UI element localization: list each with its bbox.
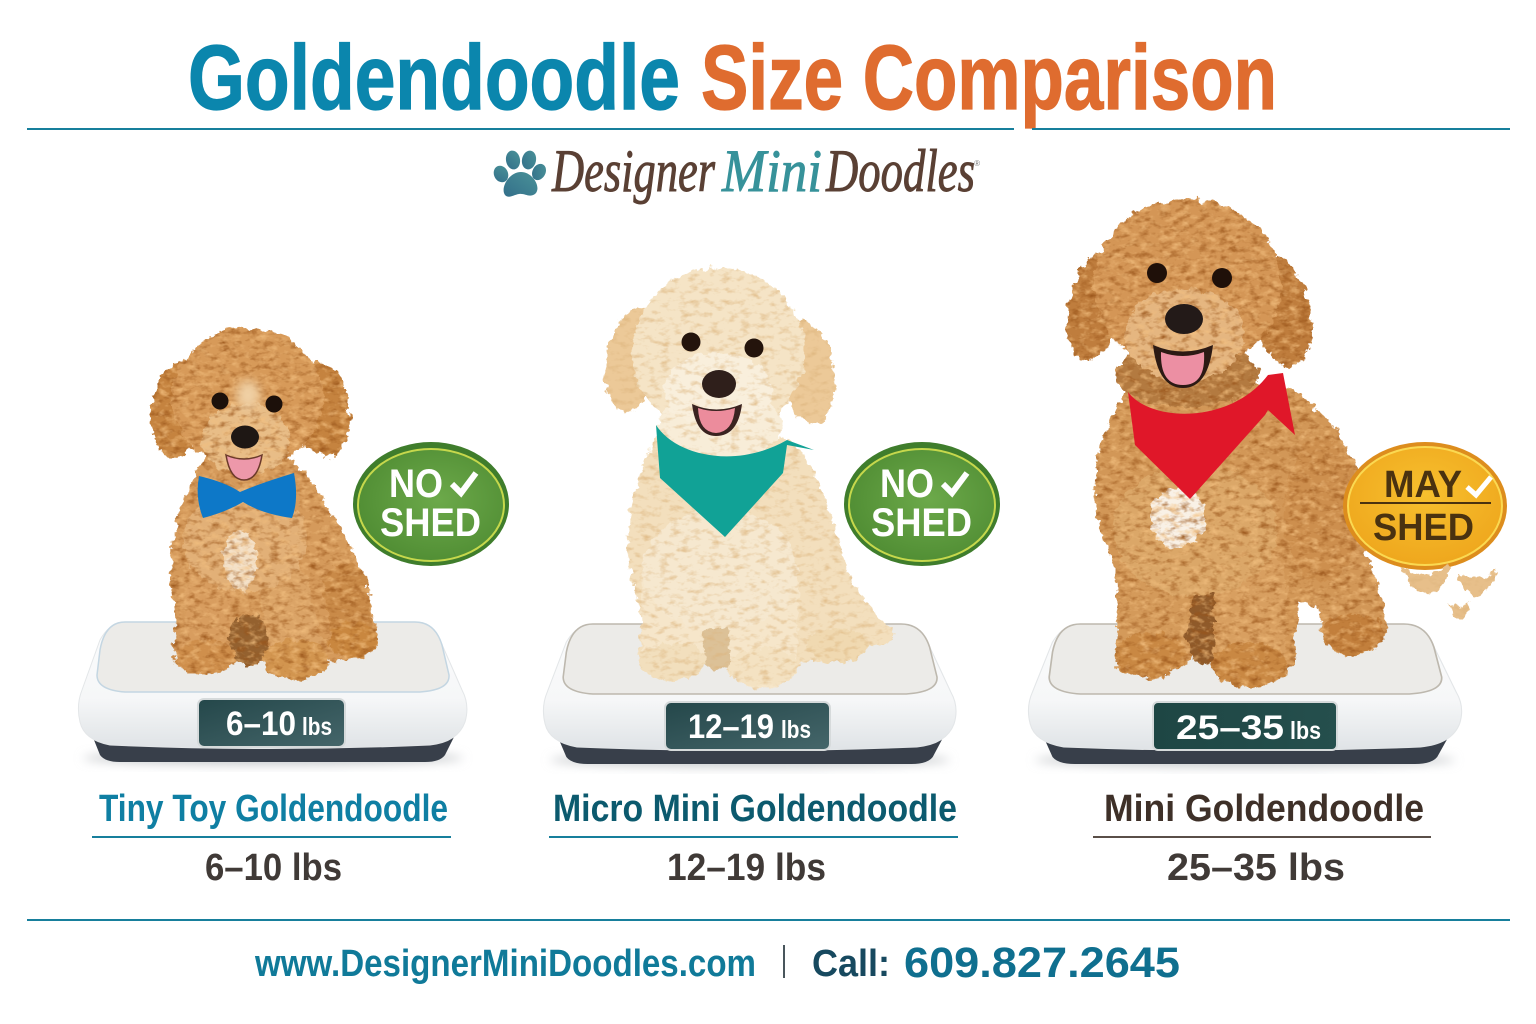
badge: no shed: NO xyxy=(389,462,443,506)
scale display: 12–19 xyxy=(688,708,774,746)
title xyxy=(188,27,1277,129)
label: micro mini: Micro Mini Goldendoodle xyxy=(553,788,957,830)
label: mini: 25–35 lbs xyxy=(1167,847,1345,889)
eyes and nose xyxy=(1147,263,1232,388)
dog: cream micro mini xyxy=(597,268,895,686)
shed fur tufts xyxy=(1402,564,1498,619)
bow tie xyxy=(198,473,296,518)
footer contact xyxy=(254,939,1180,987)
label: micro mini: 12–19 lbs xyxy=(667,847,826,889)
logo wordmark: ® xyxy=(974,159,980,168)
title: Size Comparison xyxy=(701,27,1277,129)
panel: micro mini goldendoodle xyxy=(543,268,1000,889)
logo wordmark xyxy=(551,138,980,204)
label: tiny toy xyxy=(92,788,451,889)
footer contact: www.DesignerMiniDoodles.com xyxy=(254,943,756,985)
check mark xyxy=(1467,477,1491,495)
check mark xyxy=(943,473,967,493)
icon: paw print xyxy=(491,149,549,197)
label: micro mini xyxy=(549,788,958,889)
scale display: 25–35 xyxy=(1176,709,1284,747)
badge: may shed: SHED xyxy=(1373,507,1474,549)
teal bandana xyxy=(656,425,814,537)
dog: tiny toy puppy xyxy=(145,328,378,680)
title: Goldendoodle xyxy=(188,27,680,129)
scale: micro mini xyxy=(543,624,956,767)
label: mini xyxy=(1093,788,1431,889)
logo: Designer Mini Doodles xyxy=(491,138,980,204)
badge: no shed xyxy=(844,442,1000,566)
scale display: 6–10 xyxy=(226,705,296,743)
eyes and nose xyxy=(212,392,282,480)
scale display: lbs xyxy=(1290,717,1321,745)
dog: large mini xyxy=(1056,199,1387,687)
eyes and nose xyxy=(682,332,764,436)
footer rule xyxy=(27,919,1510,921)
logo wordmark: Mini xyxy=(721,138,822,204)
label: mini: Mini Goldendoodle xyxy=(1104,788,1424,830)
scale: mini xyxy=(1028,624,1462,767)
scale display: lbs xyxy=(302,713,332,741)
badge: may shed: MAY xyxy=(1384,464,1462,506)
badge: no shed: SHED xyxy=(380,501,481,545)
logo wordmark: Doodles xyxy=(825,138,975,204)
check mark xyxy=(452,473,476,493)
scale: tiny toy xyxy=(78,622,467,765)
footer contact: 609.827.2645 xyxy=(904,939,1180,987)
scale display: lbs xyxy=(781,716,811,744)
badge: no shed xyxy=(353,442,509,566)
panel: mini goldendoodle xyxy=(1028,199,1507,889)
logo wordmark: Designer xyxy=(551,138,715,204)
badge: may shed xyxy=(1343,442,1507,619)
label: tiny toy: Tiny Toy Goldendoodle xyxy=(99,788,448,830)
scale display xyxy=(665,702,830,750)
header rule xyxy=(27,128,1510,130)
panel: tiny toy goldendoodle xyxy=(78,328,509,889)
badge: no shed: NO xyxy=(880,462,934,506)
red bandana xyxy=(1128,373,1295,499)
footer contact: Call: xyxy=(812,943,890,985)
scale display xyxy=(198,699,345,747)
label: tiny toy: 6–10 lbs xyxy=(205,847,342,889)
scale display xyxy=(1153,702,1337,750)
badge: no shed: SHED xyxy=(871,501,972,545)
